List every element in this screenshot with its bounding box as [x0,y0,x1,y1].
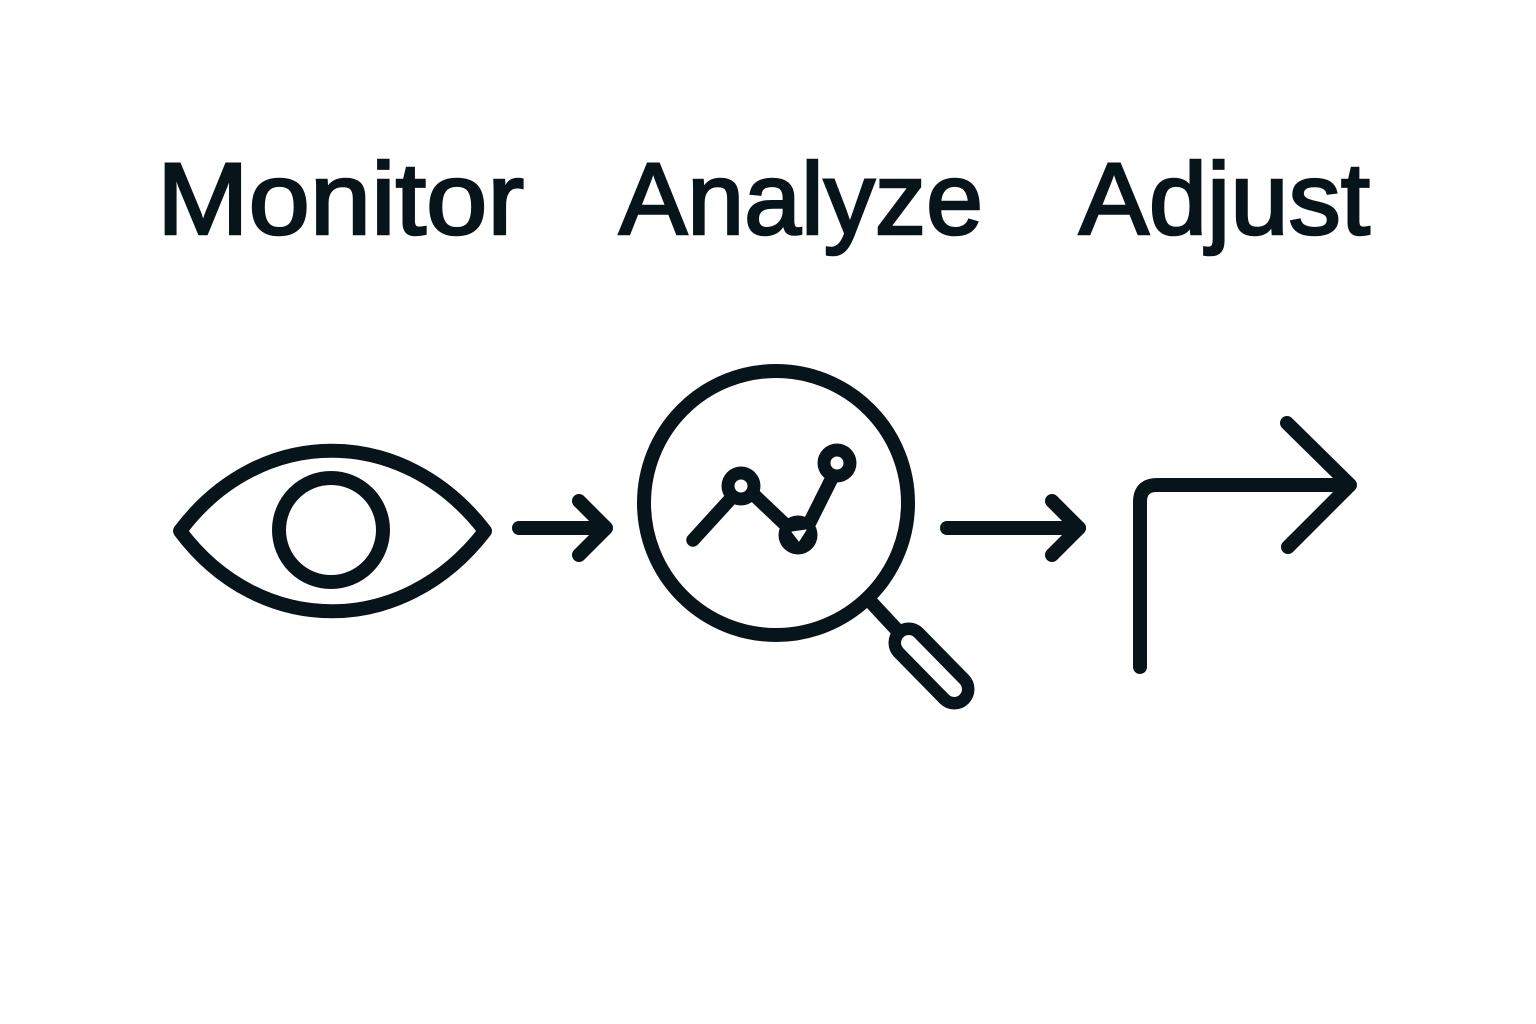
arrow: monitor to analyze [519,501,606,555]
label: Adjust: Adjust [1079,142,1370,256]
icon: magnifying glass with chart [644,371,974,709]
icon: adjust turn arrow [1140,423,1350,667]
label: Analyze: Analyze [619,142,983,256]
arrow: analyze to adjust [947,501,1079,555]
icon: eye [180,451,485,611]
label: Monitor: Monitor [157,142,524,256]
